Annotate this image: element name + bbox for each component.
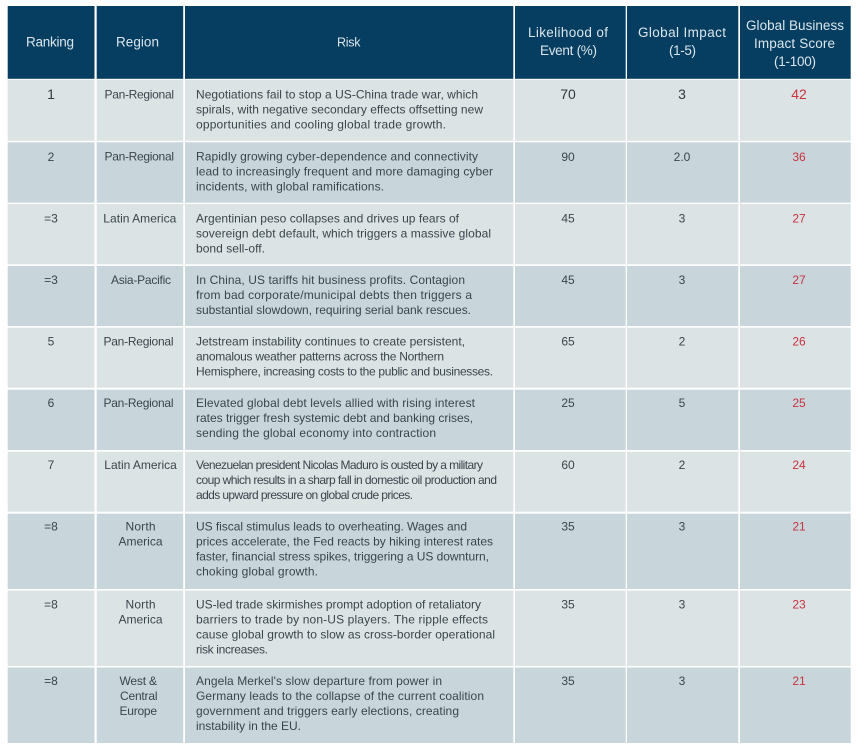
risk description: Negotiations fail to stop a US-China trade war, which (196, 87, 478, 101)
impact: 2.0 (674, 150, 691, 164)
table header row (8, 6, 851, 79)
likelihood: 60 (561, 458, 575, 472)
rank: 5 (48, 334, 55, 348)
risk description: Elevated global debt levels allied with rising interest (196, 396, 476, 410)
risk description: opportunities and cooling global trade growth. (196, 117, 446, 131)
likelihood: 65 (561, 334, 575, 348)
risk description (196, 458, 497, 502)
rank: =8 (44, 674, 58, 688)
risk description: Venezuelan president Nicolas Maduro is ousted by a military (196, 458, 483, 472)
risk description (196, 674, 484, 733)
score: 27 (792, 273, 806, 287)
row 1 (8, 80, 851, 141)
header: business impact score: (1-100) (774, 54, 816, 69)
impact: 3 (679, 674, 686, 688)
risk description: Angela Merkel's slow departure from power in (196, 674, 442, 688)
risk description: coup which results in a sharp fall in domestic oil production and (196, 473, 497, 487)
rank: =8 (44, 598, 58, 612)
risk description: sovereign debt default, which triggers a massive global (196, 226, 491, 240)
rank: =8 (44, 520, 58, 534)
row 8 (8, 514, 851, 589)
header: region: Region (116, 34, 159, 50)
likelihood: 35 (561, 674, 575, 688)
likelihood: 90 (561, 150, 575, 164)
region (118, 597, 163, 626)
risk description (196, 150, 493, 194)
header: likelihood: Likelihood of (528, 25, 608, 40)
risk description (196, 273, 472, 317)
risk description: rates trigger fresh systemic debt and banking crises, (196, 411, 473, 425)
region: Pan-Regional (104, 334, 174, 348)
row 3 (8, 204, 851, 264)
row 5 (8, 328, 851, 388)
risk description (196, 396, 476, 440)
risk description: anomalous weather patterns across the Northern (196, 349, 444, 363)
row 2 (8, 142, 851, 203)
score: 26 (792, 334, 806, 348)
rank: 2 (48, 150, 55, 164)
likelihood: 35 (561, 520, 575, 534)
risk description: choking global growth. (196, 564, 318, 578)
header: risk: Risk (337, 36, 361, 50)
likelihood: 35 (561, 598, 575, 612)
header: likelihood (528, 25, 608, 58)
risk description: US-led trade skirmishes prompt adoption of retaliatory (196, 597, 481, 611)
risk description (196, 597, 495, 656)
region: West & (120, 674, 157, 688)
region: America (118, 612, 163, 626)
header: ranking: Ranking (26, 34, 74, 50)
rank: =3 (44, 212, 58, 226)
header: business impact score (746, 18, 844, 69)
risk description: bond sell-off. (196, 241, 265, 255)
region: Latin America (104, 458, 177, 472)
impact: 3 (679, 520, 686, 534)
rank: =3 (44, 273, 58, 287)
impact: 5 (679, 396, 686, 410)
risk description: barriers to trade by non-US players. The ripple effects (196, 612, 488, 626)
region: Asia-Pacific (111, 273, 171, 287)
header: global impact: (1-5) (669, 43, 696, 58)
header: global impact: Global Impact (638, 25, 726, 40)
region: Pan-Regional (104, 396, 174, 410)
impact: 2 (679, 334, 686, 348)
row 10 (8, 668, 851, 743)
risk description: government and triggers early elections, creating (196, 704, 459, 718)
region: Latin America (103, 211, 177, 225)
likelihood: 45 (561, 273, 575, 287)
likelihood: 45 (561, 212, 575, 226)
rank: 6 (48, 396, 55, 410)
risk description: from bad corporate/municipal debts then triggers a (196, 288, 472, 302)
impact: 3 (678, 86, 686, 102)
risk description: In China, US tariffs hit business profits. Contagion (196, 273, 465, 287)
risk description: prices accelerate, the Fed reacts by hiking interest rates (196, 534, 493, 548)
risk description: Argentinian peso collapses and drives up fears of (196, 211, 460, 225)
score: 36 (792, 150, 806, 164)
risk description (196, 334, 493, 378)
score: 24 (792, 458, 806, 472)
impact: 3 (679, 273, 686, 287)
impact: 2 (679, 458, 686, 472)
risk description: incidents, with global ramifications. (196, 180, 384, 194)
region: Pan-Regional (104, 150, 174, 164)
row 4 (8, 266, 851, 326)
region: Central (120, 689, 158, 703)
region: Pan-Regional (104, 87, 174, 101)
risk description: spirals, with negative secondary effects offsetting new (196, 102, 483, 116)
score: 21 (792, 520, 806, 534)
risk description: instability in the EU. (196, 719, 301, 733)
risk description: lead to increasingly frequent and more damaging cyber (196, 165, 493, 179)
risk description (196, 519, 493, 578)
risk description: faster, financial stress spikes, triggering a US downturn, (196, 549, 489, 563)
region (120, 674, 158, 718)
row 9 (8, 591, 851, 666)
header: likelihood: Event (%) (540, 43, 597, 58)
likelihood: 70 (560, 86, 576, 102)
score: 21 (792, 674, 806, 688)
score: 25 (792, 396, 806, 410)
risk description: adds upward pressure on global crude prices. (196, 488, 413, 502)
region (118, 519, 163, 548)
likelihood: 25 (561, 396, 575, 410)
header: business impact score: Impact Score (754, 36, 835, 51)
row 6 (8, 390, 851, 450)
risk description: Rapidly growing cyber-dependence and connectivity (196, 150, 478, 164)
row 7 (8, 452, 851, 512)
region: Europe (120, 704, 157, 718)
risk description: Hemisphere, increasing costs to the public and businesses. (196, 364, 493, 378)
header: global impact (638, 25, 726, 58)
score: 42 (791, 86, 807, 102)
risk description: substantial slowdown, requiring serial bank rescues. (196, 303, 471, 317)
score: 23 (792, 598, 806, 612)
score: 27 (792, 212, 806, 226)
risk description: Jetstream instability continues to create persistent, (196, 334, 465, 348)
risk description: risk increases. (196, 642, 268, 656)
risk description: US fiscal stimulus leads to overheating. Wages and (196, 519, 467, 533)
region: North (126, 597, 156, 611)
rank: 1 (47, 86, 55, 102)
risk description: sending the global economy into contraction (196, 426, 436, 440)
risk description (196, 211, 491, 255)
rank: 7 (48, 458, 55, 472)
region: North (126, 519, 156, 533)
risk description: cause global growth to slow as cross-border operational (196, 627, 495, 641)
risk description (196, 87, 483, 131)
impact: 3 (679, 598, 686, 612)
region: America (118, 534, 163, 548)
risk description: Germany leads to the collapse of the current coalition (196, 689, 484, 703)
header: business impact score: Global Business (746, 18, 844, 33)
impact: 3 (679, 212, 686, 226)
